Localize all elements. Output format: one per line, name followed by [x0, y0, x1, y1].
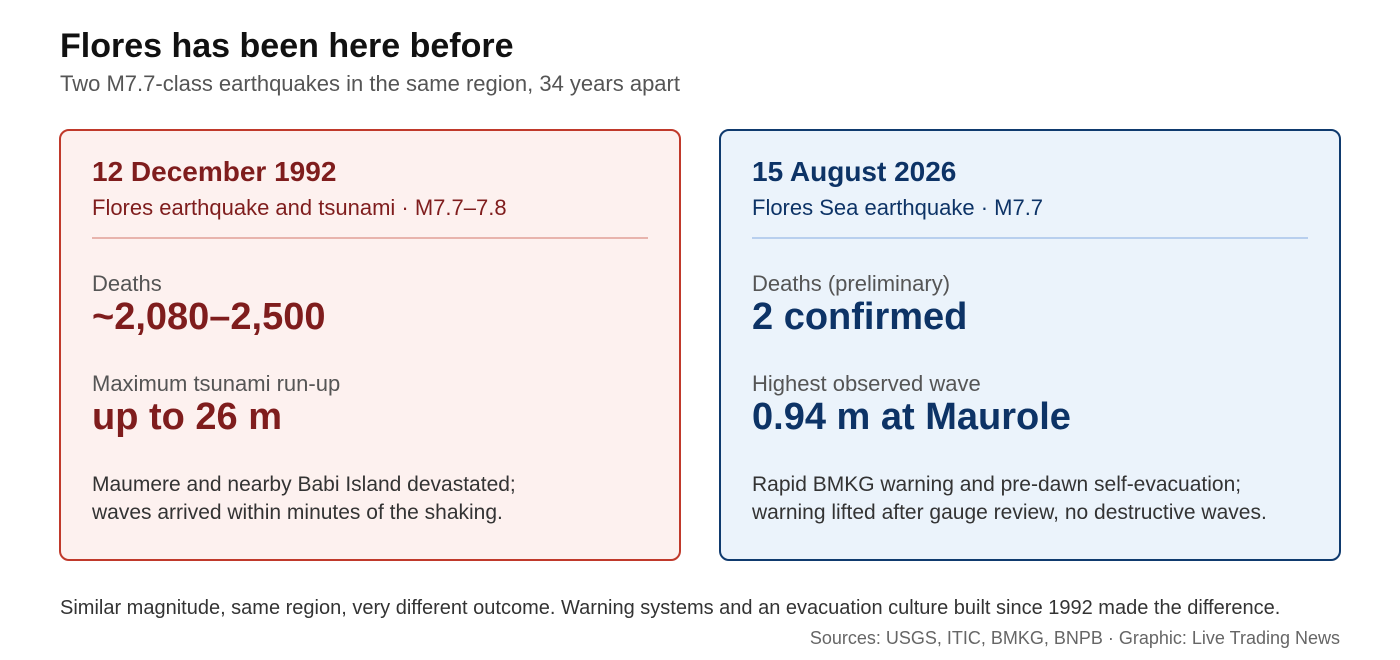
- title: Flores has been here before: [60, 27, 514, 65]
- description 1992: [92, 473, 516, 524]
- run-up label 1992: Maximum tsunami run-up: [92, 371, 340, 396]
- panel: 1992 earthquake: [59, 129, 681, 561]
- wave value 2026: 0.94 m at Maurole: [752, 396, 1071, 438]
- panel: 2026 earthquake: [719, 129, 1341, 561]
- subtitle: Two M7.7-class earthquakes in the same region, 34 years apart: [60, 71, 680, 96]
- date heading 2026: 15 August 2026: [752, 156, 956, 187]
- deaths value 1992: ~2,080–2,500: [92, 296, 326, 338]
- description 2026: Rapid BMKG warning and pre-dawn self-evacuation;: [752, 473, 1241, 496]
- deaths label 1992: Deaths: [92, 271, 162, 296]
- deaths value 2026: 2 confirmed: [752, 296, 967, 338]
- wave label 2026: Highest observed wave: [752, 371, 981, 396]
- run-up value 1992: up to 26 m: [92, 396, 282, 438]
- description 2026: warning lifted after gauge review, no destructive waves.: [752, 501, 1267, 524]
- date heading 1992: 12 December 1992: [92, 156, 336, 187]
- description 2026: [752, 473, 1267, 524]
- deaths label 2026: Deaths (preliminary): [752, 271, 950, 296]
- sources: Sources: USGS, ITIC, BMKG, BNPB · Graphic: Live Trading News: [810, 628, 1340, 648]
- description 1992: waves arrived within minutes of the shaking.: [92, 501, 503, 524]
- takeaway note: Similar magnitude, same region, very different outcome. Warning systems and an evacuation culture built since 1992 made the difference.: [60, 597, 1280, 619]
- event subtitle 2026: Flores Sea earthquake · M7.7: [752, 195, 1043, 220]
- description 1992: Maumere and nearby Babi Island devastated;: [92, 473, 516, 496]
- event subtitle 1992: Flores earthquake and tsunami · M7.7–7.8: [92, 195, 507, 220]
